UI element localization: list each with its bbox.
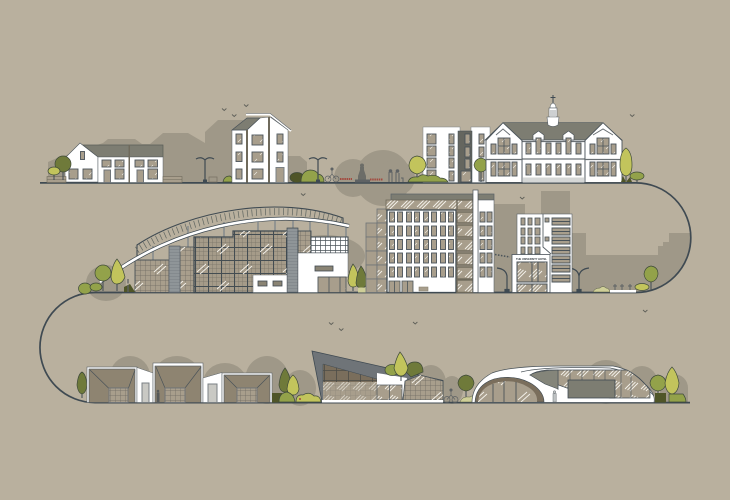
trees right of school <box>620 148 644 182</box>
structural dividers <box>247 117 269 182</box>
base strip <box>322 400 443 402</box>
statue <box>355 164 370 182</box>
hut 1 <box>87 367 137 402</box>
hut 2 <box>153 363 203 402</box>
main roof <box>485 123 622 140</box>
entrance glazing <box>318 277 346 292</box>
people with dog <box>389 170 403 182</box>
white box <box>253 275 287 292</box>
background hills: bottom row <box>110 356 688 406</box>
entrance doors <box>389 281 413 292</box>
stair tower <box>458 131 472 182</box>
upper right glass <box>298 231 311 253</box>
party wall <box>128 145 130 182</box>
background skyline: middle row <box>86 191 690 301</box>
hotel building <box>512 214 572 292</box>
bench <box>419 287 428 291</box>
street lamp and bench <box>196 158 217 182</box>
left roof <box>232 118 260 130</box>
arched canopy building <box>100 207 349 292</box>
bunting <box>495 254 510 257</box>
tree left of huts <box>77 372 87 398</box>
small bush <box>223 176 232 182</box>
cupola <box>547 95 559 126</box>
grey column right <box>287 228 298 292</box>
windows <box>236 134 283 179</box>
left wing <box>486 123 522 182</box>
scaffold glazing left <box>366 209 387 292</box>
bushes and lamp, top row <box>290 158 327 182</box>
tree and bush before curved building <box>458 375 498 402</box>
right glazing <box>403 375 443 400</box>
tall house <box>232 114 291 182</box>
block beside column <box>180 247 194 292</box>
tall office block <box>366 190 494 292</box>
box windows <box>258 281 282 286</box>
left glass block <box>135 260 169 292</box>
white grid section <box>311 237 348 253</box>
swoosh line <box>521 368 654 396</box>
roof trim <box>246 114 291 131</box>
notch glazing <box>377 385 402 400</box>
terraced house body <box>98 157 163 182</box>
curved building <box>472 366 654 402</box>
trees and bush near apartments <box>408 156 488 182</box>
school building <box>485 95 622 182</box>
windows <box>427 134 484 182</box>
top glass band <box>386 200 457 210</box>
centre wing <box>522 140 585 182</box>
office windows <box>390 212 454 277</box>
canopy beam <box>100 219 349 282</box>
canopy rail <box>137 207 343 258</box>
shell <box>472 366 654 402</box>
hotel sign: THE UNIVERSITY HOTEL <box>516 257 547 261</box>
hut 3 <box>222 373 272 402</box>
main white body <box>387 210 456 292</box>
trees right of arched building <box>348 264 367 292</box>
grey panel <box>568 380 615 398</box>
link block 1 <box>137 368 153 402</box>
school windows <box>491 138 616 176</box>
white strip body <box>478 200 494 292</box>
street lamps, middle row <box>497 268 589 292</box>
right glazing floors <box>457 200 473 292</box>
roof of terraced house <box>83 145 163 157</box>
trees left of house <box>48 156 71 180</box>
upper opening glazing <box>530 370 650 398</box>
balcony strips <box>552 218 570 282</box>
upper dark glazing <box>323 364 377 383</box>
house windows <box>69 152 158 179</box>
strip windows <box>480 212 492 277</box>
tower fin <box>473 190 478 292</box>
left glazing <box>478 381 537 402</box>
brick walls <box>47 176 182 182</box>
birds <box>222 104 647 330</box>
canopy struts <box>153 217 346 260</box>
lower glazing <box>323 382 378 400</box>
trees and bushes before museum <box>272 368 321 402</box>
white notch <box>377 373 407 400</box>
trees on museum roof <box>385 352 423 381</box>
right wing <box>585 123 622 182</box>
dormers <box>533 131 574 140</box>
roof wedge <box>312 351 443 402</box>
white volume <box>298 253 348 292</box>
roof slab <box>391 194 494 200</box>
gabled end of house <box>65 143 98 182</box>
trees at end of bottom row <box>650 367 686 402</box>
podium glazing <box>517 262 547 292</box>
link block 2 <box>203 372 222 402</box>
cyclist <box>325 168 339 182</box>
left brown frame <box>475 377 544 402</box>
garden at end of middle row <box>593 266 658 292</box>
winding road line <box>40 183 691 403</box>
rear windows <box>521 218 549 254</box>
door <box>276 168 284 182</box>
dark oval <box>530 370 558 389</box>
house row with gable <box>65 143 163 182</box>
trees left of arched building <box>78 259 135 294</box>
body <box>232 117 288 182</box>
museum with folded roof <box>312 351 443 402</box>
rear block <box>517 214 572 292</box>
window mullions <box>498 138 609 176</box>
cyclist bottom row <box>444 389 458 402</box>
background skyline: top row <box>48 120 415 206</box>
red fence <box>340 178 383 180</box>
main glass block <box>194 231 287 292</box>
grey column left <box>169 246 180 292</box>
window band <box>315 266 333 271</box>
person <box>553 391 556 402</box>
house doors <box>104 170 144 182</box>
apartment block <box>423 127 490 182</box>
person at hut 2 <box>157 390 160 402</box>
canopy ticks <box>137 212 343 250</box>
front podium <box>512 254 550 292</box>
